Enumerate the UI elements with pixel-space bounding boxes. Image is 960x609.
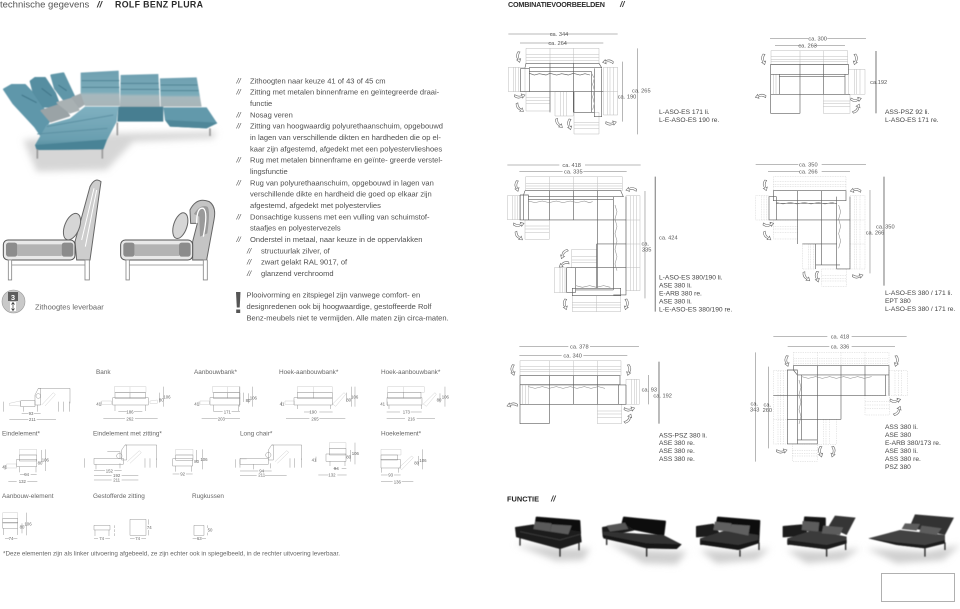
plan: ASS-PSZ 92 / L-ASO-ES 171: ca. 300 <box>808 36 827 42</box>
labels: element names: Long chair* <box>240 430 273 438</box>
text block: specifications: Onderstel in metaal, naar keuze in de oppervlakken <box>250 235 422 244</box>
plan: ASS 380 with E-ARB 380/173 and PSZ 380 <box>750 335 941 471</box>
labels: element names <box>2 369 441 500</box>
front view: aanbouwbank: 203 <box>218 416 226 421</box>
seats <box>35 107 217 150</box>
front view: aanbouwbank: 41 <box>194 401 200 406</box>
text block: specifications <box>236 76 443 278</box>
front view: long chair module: 92 <box>180 472 186 477</box>
sofa: closed <box>515 518 590 561</box>
stool side view: 74 <box>99 536 105 541</box>
plan: L-ASO-ES 171 / L-E-ASO-ES 190: ca. 344 <box>550 32 568 38</box>
plan: ASS 380 with E-ARB 380/173 and PSZ 380: ASE 380 li. <box>885 448 918 455</box>
text block: specifications: // <box>236 235 242 244</box>
front view: aanbouwbank dims: 80 <box>246 398 251 403</box>
labels: element names: Hoekelement* <box>381 430 422 438</box>
side view: eindelement met zitting <box>85 445 157 483</box>
stool top view: 74 <box>135 536 141 541</box>
front view: element 132: 41 <box>312 458 317 463</box>
front view: hoek-aanbouwbank 173: 216 <box>408 416 416 421</box>
plan: ASS-PSZ 380 with ASE and ASS: ASE 380 re. <box>659 440 695 447</box>
plan: ASS 380 with E-ARB 380/173 and PSZ 380: ASS 380 li. <box>885 424 918 431</box>
plan: ASS-PSZ 92 / L-ASO-ES 171: ca. 263 <box>798 44 817 50</box>
front view: eindelement: 106 <box>42 457 50 462</box>
dimension drawings: right part <box>239 387 450 484</box>
plan: ASS-PSZ 92 / L-ASO-ES 171 <box>755 36 939 124</box>
header: combinatievoorbeelden: COMBINATIEVOORBEELDEN <box>508 0 605 9</box>
front view: bank <box>96 387 171 421</box>
upright backs <box>81 71 202 107</box>
floor shadow <box>23 132 217 172</box>
plan: L-ASO-ES 171 / L-E-ASO-ES 190: ca. 264 <box>548 41 567 47</box>
labels: element names: Eindelement* <box>2 430 41 438</box>
front view: hoek-aanbouwbank 173: 106 <box>442 395 450 400</box>
plan: ASS-PSZ 92 / L-ASO-ES 171: ASS-PSZ 92 li. <box>885 109 930 116</box>
side view ticks <box>235 459 240 468</box>
front view: eindelement: 132 <box>19 479 27 484</box>
labels: element names: Aanbouwbank* <box>194 369 238 376</box>
front view: eindelement: 94 <box>24 472 30 477</box>
sofa: one back reclined <box>783 516 860 563</box>
plan: L-ASO-ES 380/190 with ASE and E-ARB: ca. <box>642 242 650 248</box>
text block: specifications: Rug van polyurethaanschuim, opgebouwd in lagen van <box>250 178 434 187</box>
callout: exclamation note: designredenen ook bij hoogwaardige, gestoffeerde Rolf <box>246 302 432 311</box>
plan: L-ASO-ES 171 / L-E-ASO-ES 190: ca. 265 <box>632 89 651 95</box>
plan: L-ASO-ES 380/190 with ASE and E-ARB: ASE 380 li. <box>659 283 692 290</box>
stool top view <box>130 519 152 541</box>
plan: ASS 380 with E-ARB 380/173 and PSZ 380: PSZ 380 <box>885 464 911 471</box>
text block: specifications: // <box>236 156 242 165</box>
front view: hoek-aanbouwbank 190: 265 <box>311 416 319 421</box>
heading: functie <box>507 494 556 504</box>
text block: specifications: // <box>246 246 252 255</box>
labels: element names: Aanbouw-element <box>2 493 54 500</box>
plan: ASS-PSZ 380 with ASE and ASS: ASS-PSZ 380 li. <box>659 432 707 439</box>
front view: bank: 80 <box>159 397 164 402</box>
plan: ASS-PSZ 380 with ASE and ASS: ca. 192 <box>653 393 672 399</box>
plan: ASS-PSZ 380 with ASE and ASS <box>507 345 707 463</box>
side view: bank: 211 <box>29 417 36 422</box>
front view: hoek-aanbouwbank 173 <box>380 387 450 421</box>
plan: ASS-PSZ 380 with ASE and ASS: ca. 340 <box>563 354 582 360</box>
side view: eindelement met zitting: 211 <box>113 478 121 483</box>
side view: eindelement met zitting: 192 <box>113 473 121 478</box>
text block: specifications: // <box>236 76 242 85</box>
front view: hoek-aanbouwbank 190 <box>280 387 359 421</box>
plan: L-ASO-ES 380 / 171 with EPT 380: ca. 350 <box>799 162 818 168</box>
pillows <box>41 94 85 122</box>
plan: L-ASO-ES 380 / 171 with EPT 380: L-ASO-ES 380 / 171 li. <box>885 290 952 297</box>
front view: aanbouwbank: 171 <box>224 409 232 414</box>
side view: bank: 93 <box>29 411 34 416</box>
plan: L-ASO-ES 380/190 with ASE and E-ARB: E-ARB 380 re. <box>659 291 702 298</box>
front view: hoekelement: 80 <box>414 461 420 466</box>
front view: long chair module: 80 <box>194 459 200 464</box>
text block: specifications: afgestemd, afgedekt met polyestervlies <box>250 201 381 210</box>
plan: ASS 380 with E-ARB 380/173 and PSZ 380: 260 <box>763 408 772 414</box>
plan: L-ASO-ES 380 / 171 with EPT 380: ca. 350 <box>876 225 895 231</box>
side view: long chair <box>240 445 302 478</box>
icon: seat height badge with label: 3 <box>11 293 15 302</box>
sofa: both seats extended <box>697 518 770 563</box>
text block: specifications: lingsfunctie <box>250 167 288 176</box>
front view: element 132: 80 <box>346 454 352 459</box>
text block: specifications: Nosag veren <box>250 110 293 119</box>
text block: specifications: Rug met metalen binnenframe en geïnte- greerde verstel- <box>250 156 443 165</box>
icon: seat height badge with label <box>2 290 104 313</box>
front view: eindelement: 80 <box>38 461 43 466</box>
front view: aanbouwbank dims <box>239 387 258 407</box>
plan: L-ASO-ES 171 / L-E-ASO-ES 190: L-ASO-ES 171 li. <box>659 109 710 116</box>
plan: ASS 380 with E-ARB 380/173 and PSZ 380: ASE 380 <box>885 432 912 439</box>
text block: specifications: // <box>246 258 252 267</box>
front view: hoekelement <box>381 449 427 484</box>
front view: bank: 186 <box>126 409 134 414</box>
text block: specifications: staafjes en polyestervezels <box>250 224 341 233</box>
front view: bank: 41 <box>96 401 102 406</box>
plan: ASS-PSZ 92 / L-ASO-ES 171: L-ASO-ES 171 re. <box>885 117 939 124</box>
plan: L-ASO-ES 171 / L-E-ASO-ES 190: L-E-ASO-ES 190 re. <box>659 117 719 124</box>
plan: ASS-PSZ 380 with ASE and ASS: ca. 93 <box>642 387 657 393</box>
front view: bank: 262 <box>126 416 134 421</box>
left reclined backs <box>4 73 74 135</box>
plan: L-ASO-ES 171 / L-E-ASO-ES 190: ca. 190 <box>618 95 636 101</box>
plan: ASS 380 with E-ARB 380/173 and PSZ 380: E-ARB 380/173 re. <box>885 440 941 447</box>
header: combinatievoorbeelden: // <box>619 0 625 9</box>
front view: aanbouw-element: 74 <box>9 536 14 541</box>
heading: functie: FUNCTIE <box>507 494 539 504</box>
plan: L-ASO-ES 380 / 171 with EPT 380: EPT 380 <box>885 298 911 305</box>
empty outline box <box>882 574 954 602</box>
text block: specifications: // <box>236 212 242 221</box>
sofa: one seat extended <box>603 518 687 564</box>
plan: ASS-PSZ 380 with ASE and ASS: ca. 378 <box>570 345 589 351</box>
front view: eindelement: 41 <box>2 464 8 469</box>
callout: exclamation note: Plooivorming en zitspiegel zijn vanwege comfort- en <box>246 290 420 300</box>
text block: specifications: Zitting met metalen binnenframe en geïntegreerde draai- <box>250 88 440 97</box>
front view: hoekelement: 106 <box>419 458 427 463</box>
legs <box>37 123 210 159</box>
front view: element 132: 106 <box>352 451 360 456</box>
labels: element names: Eindelement met zitting* <box>93 430 162 438</box>
front view: hoekelement: 93 <box>388 473 394 478</box>
plan: L-ASO-ES 380 / 171 with EPT 380: ca. 266 <box>866 230 884 236</box>
text block: specifications: structuurlak zilver, of <box>261 246 331 255</box>
front view: hoek-aanbouwbank 190: 80 <box>346 397 352 402</box>
plan: ASS-PSZ 92 / L-ASO-ES 171: ca.192 <box>870 80 887 86</box>
front view: element 132: 132 <box>328 473 336 478</box>
plan: L-ASO-ES 380/190 with ASE and E-ARB <box>507 163 732 314</box>
stool top view: 74 <box>147 525 152 530</box>
photo: teal corner sofa <box>4 71 217 172</box>
front view: hoek-aanbouwbank 190: 41 <box>280 402 285 407</box>
text block: specifications: // <box>236 110 242 119</box>
text block: specifications: // <box>236 88 242 97</box>
labels: element names: Hoek-aanbouwbank* <box>279 369 339 376</box>
text block: specifications: zwart gelakt RAL 9017, of <box>261 258 348 267</box>
plan: ASS 380 with E-ARB 380/173 and PSZ 380: 343 <box>750 407 759 413</box>
side view: bank <box>3 388 70 422</box>
text block: specifications: // <box>236 122 242 131</box>
plan: ASS 380 with E-ARB 380/173 and PSZ 380: ca. 418 <box>831 335 849 341</box>
text block: specifications: Donsachtige kussens met een vulling van schuimstof- <box>250 212 430 221</box>
plan: L-ASO-ES 380/190 with ASE and E-ARB: L-ASO-ES 380/190 li. <box>659 275 723 282</box>
header: technische gegevens <box>0 0 204 10</box>
side view: long chair: 94 <box>259 468 265 473</box>
stool side view <box>94 525 114 541</box>
plan: L-ASO-ES 380 / 171 with EPT 380: L-ASO-ES 380 / 171 re. <box>885 306 955 313</box>
text block: specifications: Zitting van hoogwaardig polyurethaanschuim, opgebouwd <box>250 122 443 131</box>
callout: exclamation note <box>236 290 449 322</box>
heading: functie: // <box>550 494 556 504</box>
front view: hoek-aanbouwbank 173: 80 <box>437 397 442 402</box>
callout: exclamation note: Benz-meubels niet te vermijden. Alle maten zijn circa-maten. <box>246 313 449 322</box>
sofa: fully reclined <box>867 514 960 563</box>
front view: aanbouw-element: 106 <box>24 521 32 526</box>
text block: specifications: // <box>246 269 252 278</box>
plan: L-ASO-ES 380/190 with ASE and E-ARB: ASE 380 li. <box>659 299 692 306</box>
labels: element names: Bank <box>96 369 111 376</box>
front view: hoekelement: 136 <box>394 479 402 484</box>
front view: hoek-aanbouwbank 190: 190 <box>309 409 317 414</box>
photos: black sofa function positions <box>515 514 960 564</box>
front view: eindelement <box>2 449 50 484</box>
icon: seat height badge with label: Zithoogtes leverbaar <box>35 302 104 312</box>
front view: hoek-aanbouwbank 190: 106 <box>351 395 359 400</box>
side view: eindelement met zitting: 152 <box>106 468 114 473</box>
cushion: 50 <box>208 527 213 532</box>
front view: aanbouw-element <box>3 513 32 541</box>
front view: aanbouw-element: 80 <box>20 524 25 529</box>
plan: ASS 380 with E-ARB 380/173 and PSZ 380: ca. <box>751 401 759 407</box>
cushion <box>193 525 213 541</box>
front view: bank: 106 <box>163 395 171 400</box>
cushion: 63 <box>197 536 202 541</box>
text block: specifications: functie <box>250 99 272 108</box>
front view: aanbouwbank dims: 106 <box>250 395 258 400</box>
plan: ASS-PSZ 380 with ASE and ASS: ASE 380 re. <box>659 448 695 455</box>
text block: specifications: kaar zijn afgestemd, afgedekt met een polyestervlieshoes <box>250 144 442 153</box>
plan: L-ASO-ES 380/190 with ASE and E-ARB: ca. 335 <box>564 170 583 176</box>
front view: long chair module: 106 <box>200 457 208 462</box>
plan: L-ASO-ES 380 / 171 with EPT 380: ca. 266 <box>799 170 818 176</box>
front view: hoek-aanbouwbank 173: 41 <box>380 402 386 407</box>
front view: element 132: 94 <box>334 466 339 471</box>
diagram: seat section with folded back <box>121 200 215 280</box>
labels: element names: Gestofferde zitting <box>93 493 145 500</box>
text block: specifications: glanzend verchroomd <box>261 269 334 278</box>
plan: ASS 380 with E-ARB 380/173 and PSZ 380: ASS 380 re. <box>885 456 921 463</box>
footnote: *Deze elementen zijn als linker uitvoering afgebeeld, ze zijn echter ook in spiegelbeeld, in de rechter uitvoering leverbaar. <box>3 550 340 558</box>
front view: element 132 <box>312 443 360 478</box>
plan: L-ASO-ES 380/190 with ASE and E-ARB: ca. 418 <box>562 163 581 169</box>
plan: ASS 380 with E-ARB 380/173 and PSZ 380: ca. <box>764 403 772 409</box>
diagram: seat section with upright back <box>3 180 101 280</box>
plan: L-ASO-ES 380/190 with ASE and E-ARB: ca. 424 <box>659 235 678 241</box>
text block: specifications: in lagen van verschillende dikten en hardheden die op el- <box>250 133 441 142</box>
front view: long chair module <box>173 449 208 477</box>
labels: element names: Rugkussen <box>192 493 224 500</box>
text block: specifications: verschillende dikte en hardheid die goed op elkaar zijn <box>250 190 432 199</box>
front view: aanbouwbank <box>194 387 240 421</box>
plan: L-ASO-ES 380 / 171 with EPT 380 <box>756 162 955 313</box>
plan: L-ASO-ES 380/190 with ASE and E-ARB: 335 <box>642 248 651 254</box>
text block: specifications: Zithoogten naar keuze 41 of 43 of 45 cm <box>250 76 386 85</box>
text block: specifications: // <box>236 178 242 187</box>
labels: element names: Hoek-aanbouwbank* <box>381 369 441 376</box>
plan: L-ASO-ES 380/190 with ASE and E-ARB: L-E-ASO-ES 380/190 re. <box>659 307 732 314</box>
front view: hoek-aanbouwbank 173: 173 <box>403 409 411 414</box>
dimension drawings: row one and two, left part <box>2 387 240 541</box>
side view: long chair: 211 <box>258 473 266 478</box>
plan: ASS 380 with E-ARB 380/173 and PSZ 380: ca. 336 <box>831 345 849 351</box>
plan: ASS-PSZ 380 with ASE and ASS: ASS 380 re. <box>659 456 695 463</box>
plan: L-ASO-ES 171 / L-E-ASO-ES 190 <box>508 32 719 134</box>
